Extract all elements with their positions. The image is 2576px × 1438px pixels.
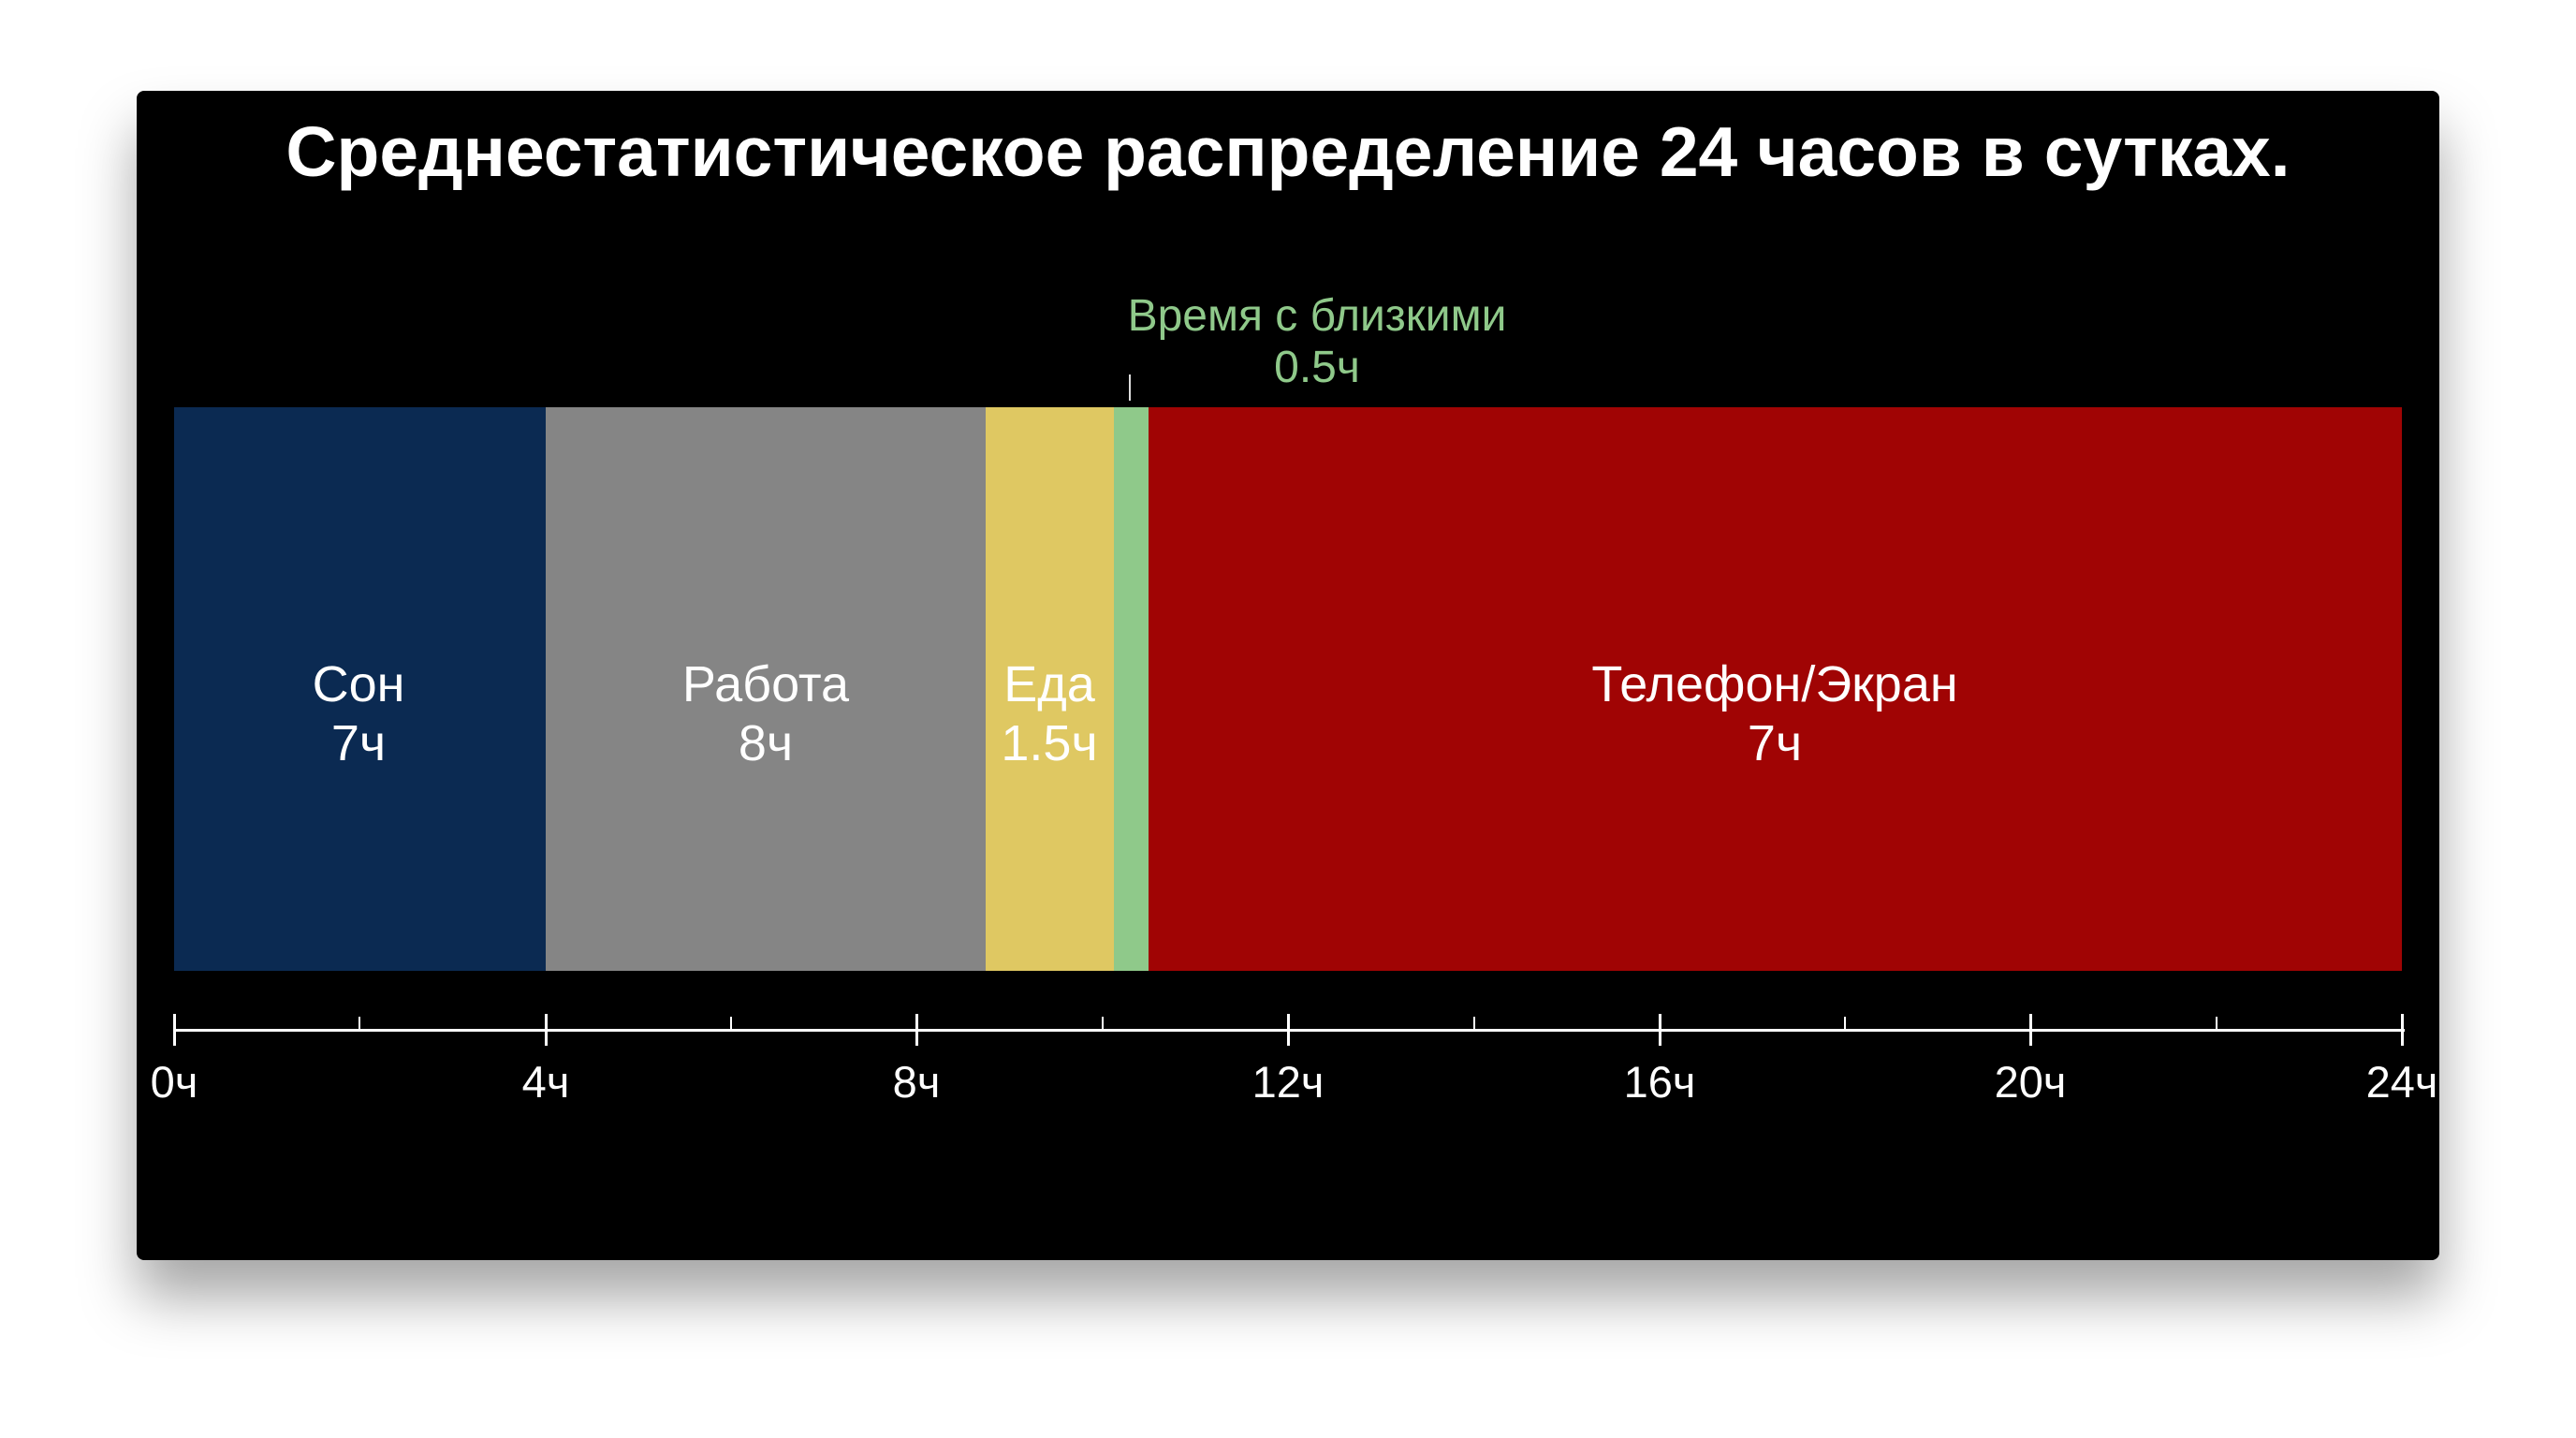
label: sleep: 7ч (331, 715, 386, 771)
segment: sleep (174, 407, 546, 971)
axis: 16ч (1624, 1057, 1695, 1107)
axis: 4ч (522, 1057, 569, 1107)
callout: time with loved ones (1128, 291, 1506, 392)
axis: 8ч (893, 1057, 940, 1107)
callout marker line (1129, 374, 1131, 401)
axis: 20ч (1995, 1057, 2066, 1107)
segment: phone (1149, 407, 2402, 971)
label: work: Работа (682, 656, 849, 712)
label: phone (1591, 656, 1958, 771)
callout: time with loved ones: 0.5ч (1274, 343, 1360, 392)
label: food (1001, 656, 1098, 771)
label: phone: 7ч (1748, 715, 1802, 771)
label: sleep (313, 656, 404, 771)
segment: loved ones (1114, 407, 1149, 971)
label: phone: Телефон/Экран (1591, 656, 1958, 712)
label: food: Еда (1003, 656, 1095, 712)
axis: 12ч (1252, 1057, 1324, 1107)
callout: time with loved ones: Время с близкими (1128, 291, 1506, 341)
axis: 24ч (2366, 1057, 2437, 1107)
label: work: 8ч (739, 715, 793, 771)
segment: food (986, 407, 1114, 971)
axis: 0ч (151, 1057, 198, 1107)
stacked bar (174, 407, 2402, 971)
panel: chart card (137, 91, 2439, 1260)
segment: work (546, 407, 986, 971)
label: food: 1.5ч (1001, 715, 1098, 771)
title: Среднестатистическое распределение 24 часов в сутках. (285, 112, 2291, 191)
label: work (682, 656, 850, 771)
label: sleep: Сон (313, 656, 404, 712)
